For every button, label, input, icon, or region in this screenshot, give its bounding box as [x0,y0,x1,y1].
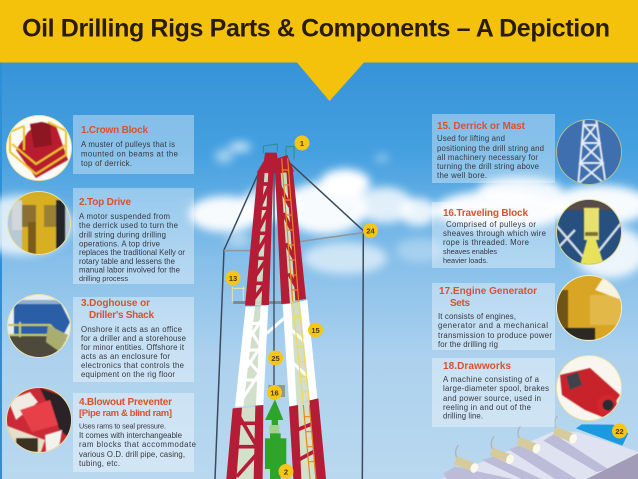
ladder [282,158,316,479]
number markers: 1 [300,139,304,148]
text block [443,220,546,265]
number markers: 16 [270,388,279,398]
upper and lower red sections [226,153,326,479]
text block: the well bore. [437,171,487,180]
heading: 18.Drawworks [443,361,511,372]
number markers [226,136,627,479]
heading: 2.Top Drive [79,197,131,208]
panel: top drive [5,188,194,284]
panel: traveling block [432,199,622,268]
text block: drill string during drilling [79,230,166,240]
text block: the derrick used to turn the [79,221,178,230]
icon: traveling block [556,199,622,265]
icon: top drive [7,191,71,255]
heading: [Pipe ram & blind ram] [79,408,172,419]
text block: ram blocks that accommodate [79,440,196,449]
text block: drilling process [79,274,128,283]
guy lines [215,162,363,479]
text block: operations. A top drive [79,240,160,248]
drilling rig illustration [215,144,363,479]
text block: tubing, etc. [79,459,120,468]
panel: crown block [6,115,194,181]
platform [232,287,282,304]
icon: engine generator [556,275,622,341]
number markers: 2 [284,468,288,476]
text block: for the drilling rig [438,340,498,349]
icon: crown block [6,115,72,181]
text block [81,140,178,168]
text block: top of derrick. [81,159,132,168]
text block: electronics that controls the [81,361,184,370]
text block: sheaves through which wire [443,229,546,238]
text block: mounted on beams at the [81,150,178,158]
text block: transmission to produce power [438,331,552,340]
number markers: 13 [229,274,237,283]
drill line [272,172,276,385]
text block: equipment on the rig floor [81,370,175,379]
text block: rope is threaded. More [443,238,529,247]
text block: sheaves enables [443,247,497,256]
text block: It comes with interchangeable [79,431,182,440]
text block: It consists of engines, [438,312,516,321]
text block: A muster of pulleys that is [81,140,175,149]
crown railing [263,144,294,159]
number markers: 15 [311,326,320,335]
text block: heavier loads. [443,256,488,265]
derrick inner fill [235,172,317,479]
text block: large-diameter spool, brakes [443,384,549,393]
pump steps [442,415,638,479]
text block: Onshore it acts as an office [81,325,182,334]
heading [81,298,154,321]
text block: Comprised of pulleys or [446,220,536,229]
icon: blowout preventer [5,387,72,455]
text block: generator and a mechanical [438,321,548,330]
heading: 16.Traveling Block [443,208,528,219]
heading: 17.Engine Generator [439,286,537,297]
panel: drawworks [432,355,622,427]
panel: derrick or mast [432,114,622,186]
text block: reeling in and out of the [443,403,531,412]
number markers: 25 [271,354,280,363]
text block [79,212,185,283]
text block [437,134,544,180]
icon: derrick [556,118,622,186]
text block [79,422,196,468]
text block: all machinery necessary for [437,153,538,162]
heading [439,286,537,309]
text block: Used for lifting and [437,134,505,143]
heading [79,397,172,419]
panel: doghouse [7,294,194,382]
mud pumps [450,415,582,474]
text block: rotary table and lessens the [79,257,175,266]
text block [81,325,186,379]
text block: for a driller and a storehouse [81,334,186,343]
heading: Sets [450,298,470,309]
text block: A machine consisting of a [443,375,540,384]
text block: various O.D. drill pipe, casing, [79,450,185,459]
header banner [0,0,638,101]
text block: replaces the traditional Kelly or [79,248,185,257]
number markers: 22 [615,427,624,436]
text block: A motor suspended from [79,212,170,221]
text block: drilling line. [443,412,483,420]
heading: 4.Blowout Preventer [79,397,172,408]
text block: positioning the drill string and [437,144,544,153]
text block: for minor entities. Offshore it [81,343,185,352]
heading: 1.Crown Block [81,125,148,136]
panel: engine generator sets [432,275,622,350]
number markers: 24 [366,226,375,236]
white mid section [235,300,317,407]
text block: manual labor involved for the [79,266,180,274]
icon: doghouse [7,294,71,362]
heading: 3.Doghouse or [81,298,150,309]
title: Oil Drilling Rigs Parts & Components – A Depiction [22,14,610,42]
traveling block [268,385,285,397]
top drive [265,399,286,479]
text block: and power source, used in [443,394,541,403]
text block [438,312,552,349]
text block: Uses rams to seal pressure. [79,422,166,430]
blue sump [576,424,628,446]
text block [443,375,549,420]
text block: acts as an enclosure for [81,352,170,361]
icon: drawworks [556,355,622,421]
text block: turning the drill string above [437,162,539,171]
heading: 15. Derrick or Mast [437,121,526,132]
heading: Driller's Shack [89,310,154,321]
panel: blowout preventer [5,387,196,472]
